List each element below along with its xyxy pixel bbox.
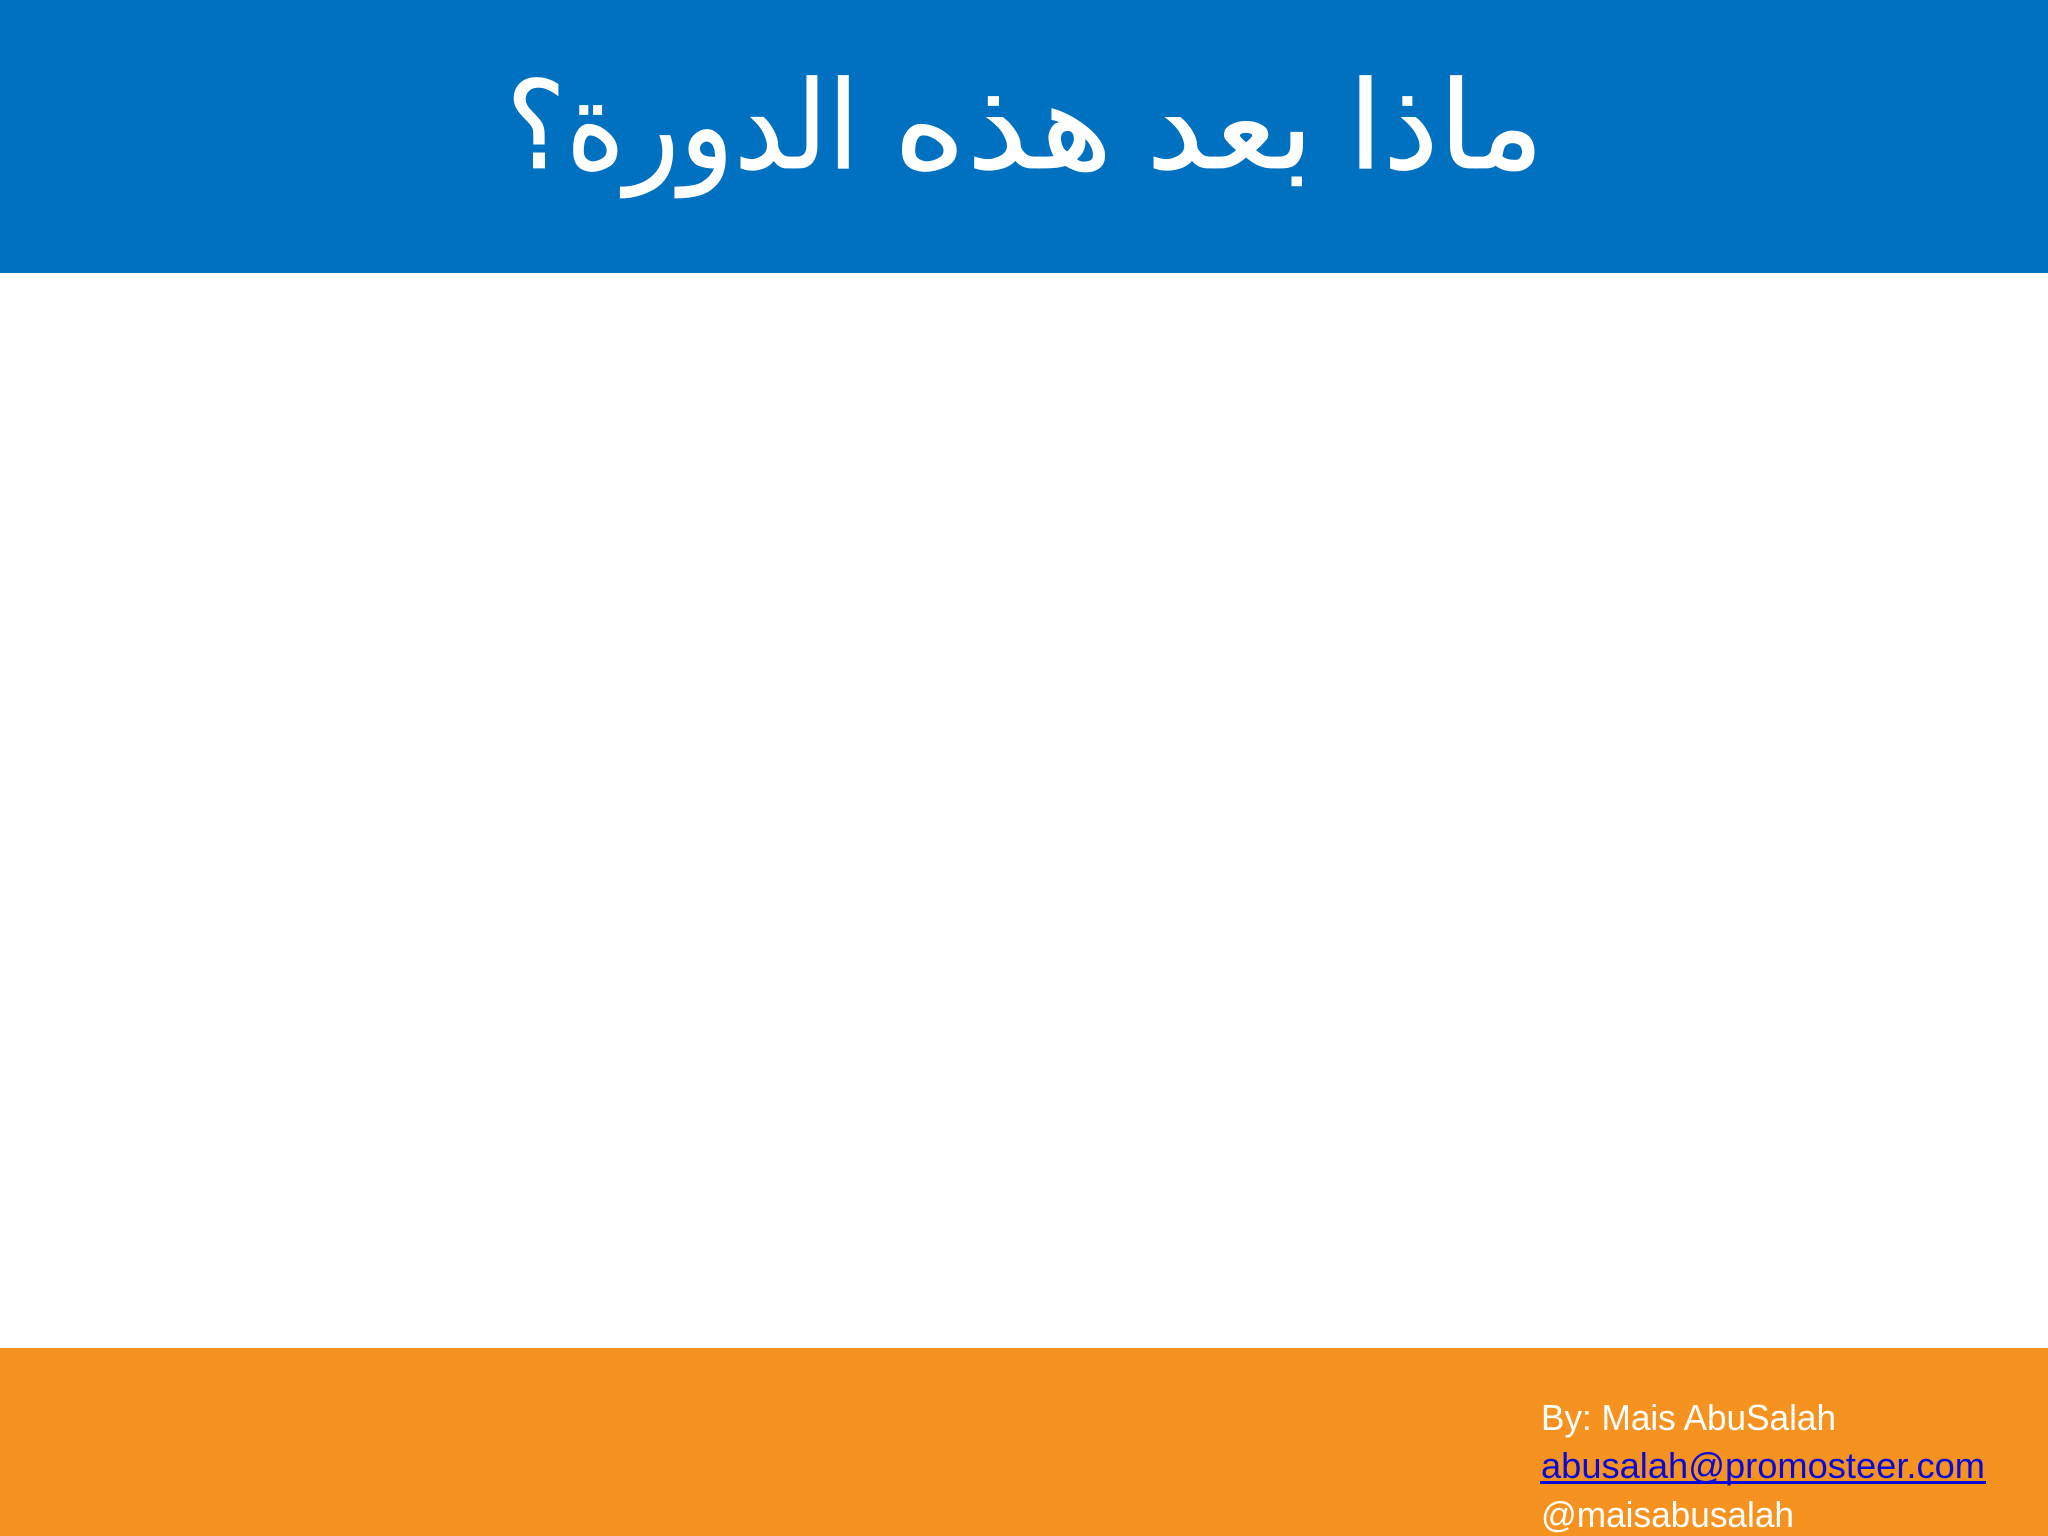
title banner: هذه bbox=[893, 55, 1113, 197]
email link: abusalah@promosteer.com bbox=[1541, 1445, 1985, 1486]
author name: By: Mais AbuSalah bbox=[1541, 1397, 1836, 1438]
title banner: الدورة؟ bbox=[506, 55, 859, 198]
title banner: ماذا bbox=[1348, 55, 1544, 197]
title banner bbox=[0, 0, 2048, 273]
social handle: @maisabusalah bbox=[1541, 1494, 1794, 1535]
title banner: بعد bbox=[1146, 55, 1314, 197]
footer band with author credits bbox=[0, 1348, 2048, 1536]
